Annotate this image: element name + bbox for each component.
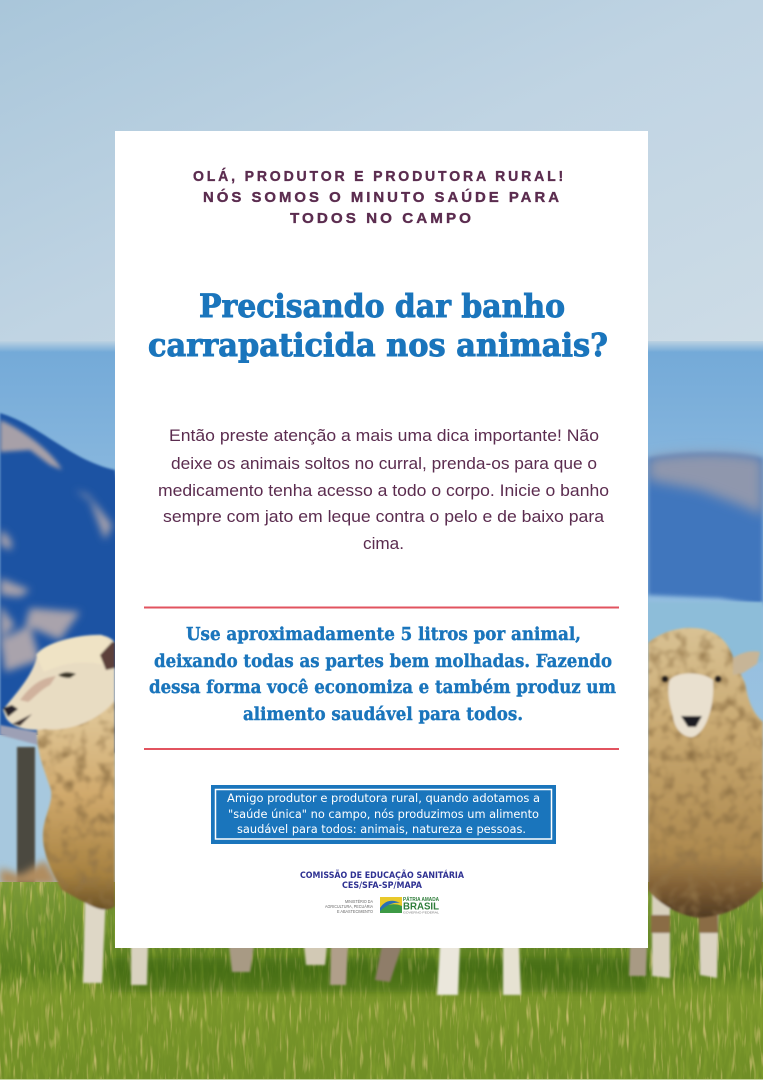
divider bottom: [144, 748, 619, 750]
heading: greeting: [193, 168, 566, 227]
heading: greeting: NÓS SOMOS O MINUTO SAÚDE PARA: [203, 188, 562, 206]
text block: highlighted advice: deixando todas as partes bem molhadas. Fazendo: [154, 652, 612, 672]
title: [148, 287, 608, 364]
callout: saúde única: saudável para todos: animais, natureza e pessoas.: [237, 823, 526, 836]
text block: highlighted advice: dessa forma você economiza e também produz um: [149, 678, 616, 698]
text block: highlighted advice: [149, 625, 616, 725]
text block: tip: sempre com jato em leque contra o pelo e de baixo para: [163, 507, 605, 526]
text block: tip: cima.: [363, 534, 404, 553]
logo: Pátria Amada Brasil: BRASIL: [403, 900, 440, 912]
footer credit: CES/SFA-SP/MAPA: [342, 881, 422, 891]
text block: highlighted advice: Use aproximadamente 5 litros por animal,: [186, 625, 581, 645]
sheep legs behind the panel: [131, 945, 647, 995]
title: carrapaticida nos animais?: [148, 326, 608, 364]
right hill: [648, 453, 763, 605]
logo: Pátria Amada Brasil: GOVERNO FEDERAL: [403, 910, 439, 914]
grass: [0, 882, 763, 1080]
logo: ministério: [325, 899, 374, 914]
heading: greeting: TODOS NO CAMPO: [290, 210, 474, 227]
text block: tip: deixe os animais soltos no curral, prenda-os para que o: [171, 454, 597, 473]
sea: [0, 341, 763, 901]
text block: tip: [158, 426, 609, 553]
title: Precisando dar banho: [199, 287, 565, 325]
left sheep: [0, 635, 115, 983]
right sheep: [648, 625, 763, 978]
footer credit: [300, 869, 464, 891]
callout: saúde única: "saúde única" no campo, nós produzimos um alimento: [228, 808, 539, 821]
logo: ministério: E ABASTECIMENTO: [337, 909, 374, 914]
callout: saúde única: [211, 785, 556, 844]
text block: tip: Então preste atenção a mais uma dica importante! Não: [169, 426, 599, 445]
footer credit: COMISSÃO DE EDUCAÇÃO SANITÁRIA: [300, 869, 464, 881]
text block: highlighted advice: alimento saudável para todos.: [243, 705, 523, 725]
callout: saúde única: Amigo produtor e produtora rural, quando adotamos a: [227, 792, 540, 805]
divider top: [144, 606, 619, 608]
logo: ministério: AGRICULTURA, PECUÁRIA: [325, 904, 373, 909]
heading: greeting: OLÁ, PRODUTOR E PRODUTORA RURAL!: [193, 168, 566, 185]
panel: white content card: [115, 131, 648, 948]
logo: Pátria Amada Brasil: [380, 896, 440, 914]
pale water and fence post: [0, 602, 763, 885]
sky: [0, 0, 763, 350]
logo: ministério: MINISTÉRIO DA: [345, 899, 373, 904]
logo: Pátria Amada Brasil: PÁTRIA AMADA: [403, 896, 439, 903]
text block: tip: medicamento tenha acesso a todo o corpo. Inicie o banho: [158, 481, 609, 500]
left hill: [0, 413, 160, 760]
